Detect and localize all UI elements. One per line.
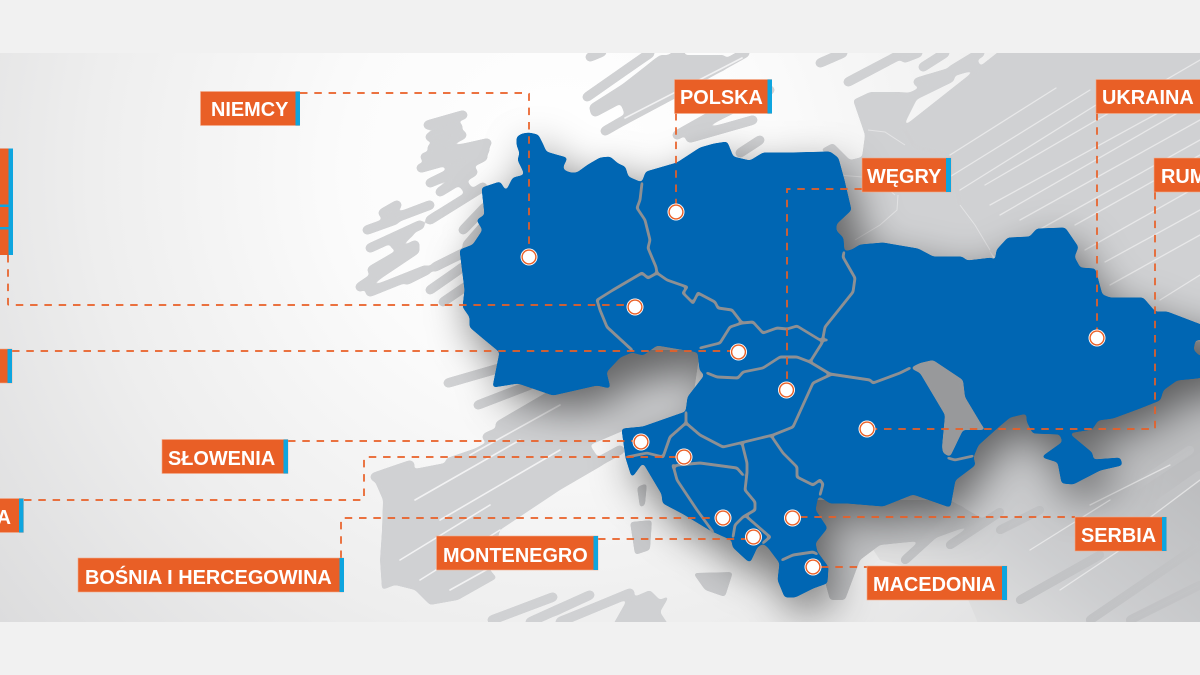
map shadow: [468, 149, 1200, 613]
label: POLSKA: POLSKA: [680, 87, 763, 109]
label: WĘGRY: WĘGRY: [867, 166, 941, 188]
label: BOŚNIA I HERCEGOWINA: [78, 558, 344, 592]
label: MACEDONIA: MACEDONIA: [873, 574, 996, 596]
label: POLSKA: [674, 80, 772, 114]
label: stacked left tag: [0, 148, 13, 255]
country borders: [597, 183, 973, 560]
label: MONTENEGRO: [436, 536, 598, 570]
connector lines: [8, 93, 1155, 567]
label: CHORWACJA: [0, 498, 24, 532]
moldova cut-out: [910, 360, 987, 457]
map: countries: [460, 133, 1200, 597]
label: SŁOWENIA: [162, 440, 288, 474]
label: UKRAINA: UKRAINA: [1102, 87, 1194, 109]
label: WĘGRY: [862, 158, 951, 192]
label: RUMUNIA: [1154, 158, 1200, 192]
location markers: [520, 204, 1106, 576]
label: MACEDONIA: [867, 566, 1007, 600]
label: MONTENEGRO: MONTENEGRO: [443, 545, 588, 567]
label: NIEMCY: NIEMCY: [211, 99, 288, 121]
label: UKRAINA: [1096, 80, 1200, 114]
background land silhouettes: [360, 45, 1200, 640]
label: NIEMCY: [200, 92, 300, 126]
country area: blue region: [460, 133, 1200, 597]
label: left tag: [0, 349, 12, 383]
label: SERBIA: SERBIA: [1081, 525, 1156, 547]
label: BOŚNIA I HERCEGOWINA: BOŚNIA I HERCEGOWINA: [85, 565, 332, 589]
label: SŁOWENIA: SŁOWENIA: [168, 448, 275, 470]
label: SERBIA: [1075, 517, 1166, 551]
